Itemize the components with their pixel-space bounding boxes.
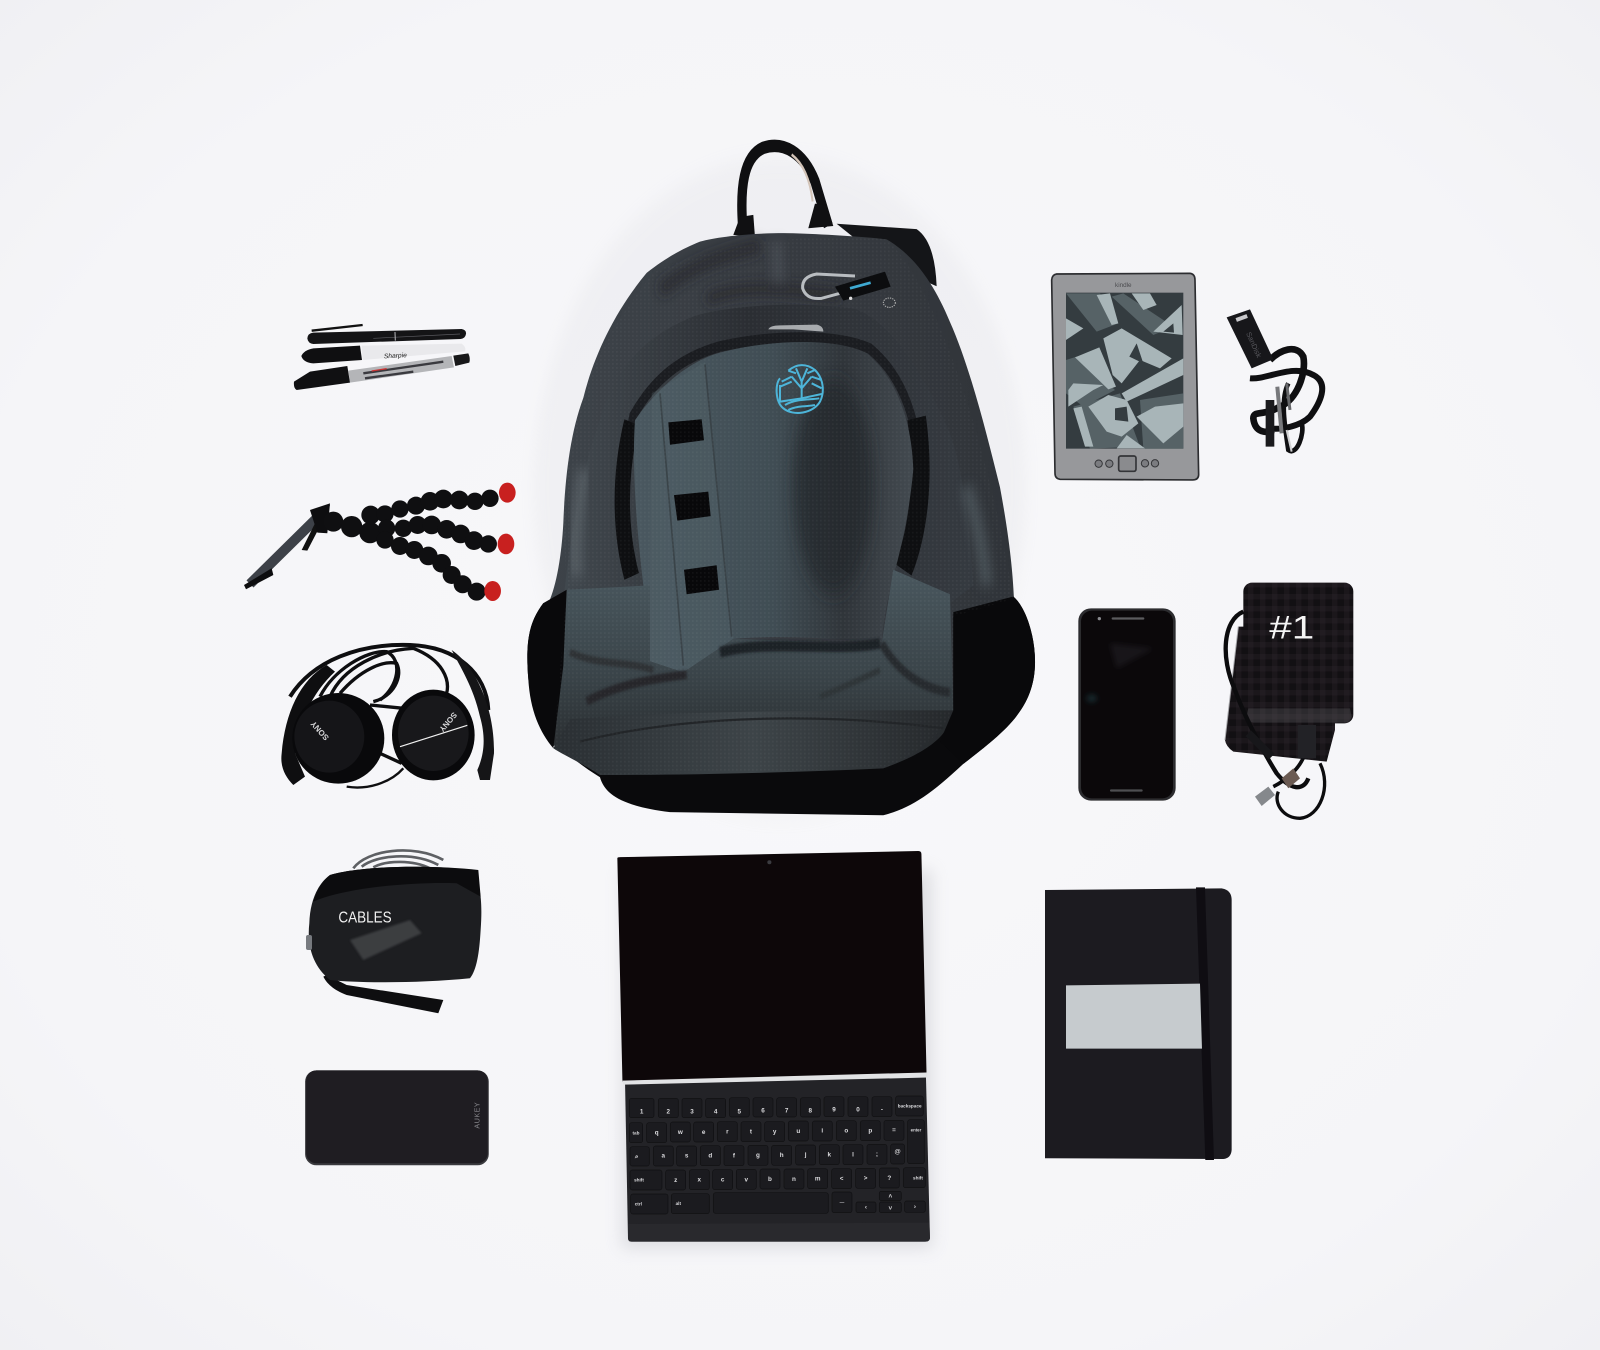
left side mesh pocket (527, 590, 567, 748)
key labels: z (674, 1177, 677, 1184)
key labels: 5 (738, 1108, 742, 1115)
clip (244, 503, 330, 589)
key labels: > (864, 1175, 868, 1182)
power bank (305, 1070, 489, 1165)
cables (290, 645, 488, 787)
key labels: x (698, 1177, 702, 1184)
key labels: 9 (832, 1107, 836, 1114)
key labels: k (828, 1151, 832, 1158)
pen two: marker: Sharpie (384, 352, 407, 360)
chalk number: #1 (1269, 609, 1314, 645)
key labels: m (815, 1176, 821, 1183)
lower carabiner (768, 325, 823, 332)
speakers (1112, 617, 1144, 620)
key labels: w (677, 1129, 683, 1136)
screen (1066, 293, 1183, 449)
key labels: ctrl (635, 1201, 642, 1206)
buttons (1095, 456, 1159, 471)
zipper arch (622, 338, 922, 576)
key labels: i (821, 1128, 823, 1135)
key labels: q (655, 1129, 659, 1136)
key labels: enter (911, 1128, 922, 1133)
pen three: marker (294, 353, 470, 390)
keys (629, 1096, 925, 1214)
coiled cable (353, 850, 443, 868)
legs (323, 490, 499, 601)
wrist strap (323, 975, 443, 1013)
usb cables (1226, 612, 1325, 818)
key labels: backspace (898, 1104, 922, 1109)
shadow (533, 157, 1027, 817)
right ear cup (392, 690, 475, 780)
phone (1078, 608, 1176, 801)
key labels: c (721, 1177, 725, 1184)
key labels: @ (895, 1148, 901, 1155)
key labels: g (756, 1152, 760, 1159)
key labels: 0 (856, 1107, 860, 1114)
front pocket (634, 342, 913, 672)
headphones (281, 645, 494, 787)
zip pull (835, 272, 895, 307)
tablet shadow (622, 870, 932, 1248)
key labels: s (685, 1153, 689, 1160)
dark sheen on front pocket (793, 380, 873, 594)
key labels: r (726, 1128, 729, 1135)
key labels: b (768, 1176, 772, 1183)
handle (733, 146, 833, 237)
screen reflection (1086, 643, 1153, 702)
screen (617, 851, 927, 1082)
power bank: AUKEY (474, 1102, 482, 1129)
key labels: = (892, 1127, 896, 1134)
key labels: n (792, 1176, 796, 1183)
hinge (622, 1072, 928, 1085)
fabric texture (553, 237, 1013, 775)
white label (1066, 984, 1202, 1049)
camera dot (1098, 617, 1101, 620)
keyboard (625, 1077, 930, 1242)
key labels: h (780, 1152, 784, 1159)
carabiners and logo (768, 272, 895, 413)
key labels: p (868, 1127, 872, 1134)
key labels: 7 (785, 1108, 789, 1115)
key labels: d (708, 1152, 712, 1159)
middle pocket panel (563, 305, 973, 603)
backpack (527, 146, 1035, 817)
key labels: ˅ (888, 1205, 892, 1212)
cables pouch (306, 850, 481, 1013)
headband (281, 665, 335, 785)
usb plugs (1282, 768, 1300, 788)
key labels: › (914, 1203, 916, 1210)
lower pocket (553, 570, 953, 746)
tripod with phone clip (244, 483, 516, 601)
key labels: < (840, 1175, 844, 1182)
kindle e-reader (1052, 273, 1199, 480)
zip pull (306, 935, 312, 950)
key labels: — (840, 1199, 845, 1204)
right ear cup: SONY (437, 710, 459, 734)
camera (767, 860, 771, 864)
key labels: ; (876, 1151, 878, 1158)
key labels: a (662, 1153, 666, 1160)
key labels: shift (634, 1178, 644, 1183)
upper carabiner (803, 274, 855, 299)
lanyard (1250, 349, 1322, 452)
upper body panel (548, 233, 1014, 719)
key labels: l (852, 1151, 854, 1158)
key labels: ⌕ (634, 1153, 638, 1160)
key labels: - (881, 1107, 883, 1114)
left ear cup: SONY (309, 719, 331, 742)
external hard drives (1225, 583, 1353, 818)
key labels: ˄ (888, 1193, 892, 1200)
key labels: e (702, 1129, 706, 1136)
right side mesh pocket (940, 596, 1035, 764)
rear strap (837, 224, 937, 286)
key labels: y (773, 1128, 777, 1135)
lower drive (1225, 627, 1335, 762)
lower pocket folds (570, 643, 950, 701)
key labels: o (844, 1128, 848, 1135)
upper drive (1243, 583, 1353, 723)
pen two: marker (301, 344, 465, 363)
key labels: ‹ (865, 1204, 867, 1211)
key labels: tab (633, 1130, 640, 1135)
body (1052, 273, 1199, 480)
key labels: 6 (761, 1108, 765, 1115)
side highlights (575, 469, 583, 576)
key labels: shift (913, 1175, 923, 1180)
key labels (633, 1104, 923, 1212)
key labels: 4 (714, 1108, 718, 1115)
key labels: 8 (809, 1108, 813, 1115)
key labels: u (796, 1128, 800, 1135)
key labels: 3 (690, 1108, 694, 1115)
red feet (484, 483, 516, 601)
key labels: 1 (640, 1108, 644, 1115)
key labels: f (733, 1152, 736, 1159)
usb stick with lanyard (1227, 309, 1322, 452)
pen one (307, 325, 466, 344)
elastic band (1196, 887, 1214, 1160)
key labels: t (750, 1128, 753, 1135)
bottom panel (553, 710, 953, 775)
usb stick with lanyard: SanDisk (1244, 330, 1264, 359)
key labels: j (804, 1152, 807, 1159)
logo: tree (777, 365, 823, 413)
key labels: v (745, 1176, 749, 1183)
pouch body (309, 867, 481, 982)
top fabric folds (660, 242, 840, 300)
pens (294, 325, 470, 390)
key labels: ? (887, 1175, 891, 1182)
stick (1227, 309, 1273, 368)
tablet (617, 851, 928, 1085)
masking tape residue (350, 920, 422, 960)
key labels: 2 (667, 1108, 671, 1115)
black base and side pockets (527, 596, 1035, 815)
brand: kindle (1115, 282, 1132, 289)
chalk label: CABLES (338, 910, 392, 927)
daisy chain loops (668, 419, 719, 594)
left ear cup (292, 693, 384, 784)
notebook (1045, 887, 1232, 1160)
key labels: alt (676, 1201, 681, 1206)
webbing strip (649, 362, 733, 672)
